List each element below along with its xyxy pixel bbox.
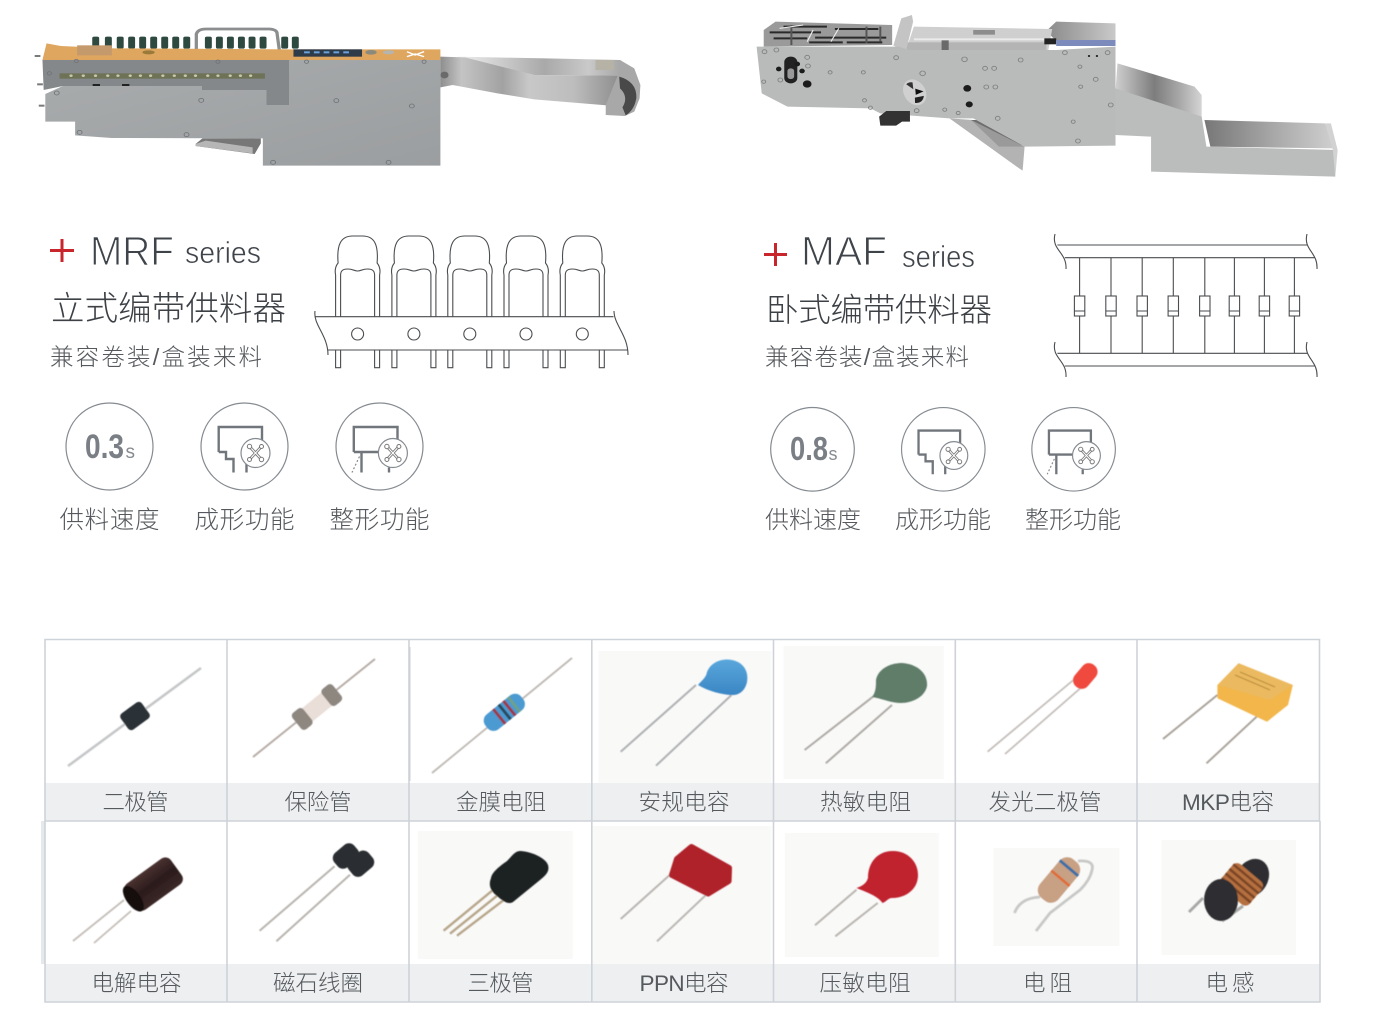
heading: series word: series — [185, 235, 261, 270]
diagram: axial taped components — [1054, 234, 1317, 377]
label: metal film resistor: 金膜电阻 — [456, 790, 546, 815]
component: electrolytic capacitor — [73, 855, 186, 943]
icon: shaping function — [1032, 408, 1115, 491]
label: forming function: 成形功能 — [895, 507, 991, 534]
label: MKP capacitor: MKP电容 — [1182, 790, 1274, 815]
component: inductor — [1189, 853, 1276, 921]
component: magnetic coil beads — [260, 840, 377, 941]
component: safety capacitor — [621, 660, 747, 766]
component: thermistor — [805, 663, 927, 763]
icon: feed speed 0.8s: s — [828, 444, 838, 464]
icon: forming function — [902, 408, 985, 491]
icon: feed speed 0.8s — [771, 408, 854, 491]
component: varistor — [815, 851, 918, 936]
component: transistor — [444, 851, 548, 936]
sub heading: 兼容卷装/盒装来料 — [50, 344, 262, 370]
heading: MRF series: MRF — [90, 228, 174, 274]
heading: series word: series — [902, 239, 975, 274]
panel: MAF series — [757, 15, 1338, 534]
label: LED: 发光二极管 — [988, 790, 1102, 815]
icon: shaping function — [336, 403, 423, 490]
component: MKP capacitor — [1163, 663, 1293, 763]
panel: MRF series — [35, 29, 640, 534]
component: resistor — [1014, 853, 1092, 931]
label: resistor: 电 阻 — [1023, 971, 1072, 996]
heading mark: red plus — [764, 243, 787, 266]
label: forming function: 成形功能 — [194, 506, 294, 534]
label: feed speed: 供料速度 — [60, 506, 160, 534]
sub heading: 兼容卷装/盒装来料 — [765, 344, 969, 370]
diagram: radial taped capacitors — [315, 236, 628, 368]
icon: feed speed 0.3s: 0.3 — [85, 428, 124, 466]
label: fuse: 保险管 — [284, 790, 352, 815]
label: shaping function: 整形功能 — [1025, 507, 1121, 534]
label: PPN capacitor: PPN电容 — [640, 971, 728, 996]
icon: feed speed 0.3s: s — [126, 442, 135, 463]
component: metal film resistor — [432, 658, 572, 773]
label: inductor: 电 感 — [1206, 971, 1254, 996]
label: diode: 二极管 — [102, 790, 168, 815]
photo: MRF feeder machine — [35, 29, 640, 166]
label: shaping function: 整形功能 — [330, 506, 430, 534]
heading mark: red plus — [50, 239, 74, 262]
label: varistor: 压敏电阻 — [820, 971, 910, 996]
icon: feed speed 0.3s — [66, 403, 153, 490]
component: fuse — [253, 659, 375, 757]
label: electrolytic capacitor: 电解电容 — [92, 971, 182, 996]
component: LED — [988, 660, 1101, 754]
label: transistor: 三极管 — [468, 971, 534, 996]
label: thermistor: 热敏电阻 — [820, 790, 911, 815]
photo: MAF feeder machine — [757, 15, 1338, 177]
icon: feed speed 0.8s: 0.8 — [790, 430, 828, 467]
heading: horizontal tape feeder: 卧式编带供料器 — [766, 292, 992, 328]
heading: MAF series: MAF — [801, 228, 887, 274]
label: magnetic coil: 磁石线圈 — [273, 971, 363, 996]
heading: vertical tape feeder: 立式编带供料器 — [51, 291, 286, 328]
label: safety capacitor: 安规电容 — [638, 790, 730, 815]
panel: compatible components grid — [41, 639, 1320, 1002]
label: feed speed: 供料速度 — [765, 507, 861, 534]
icon: forming function — [201, 403, 288, 490]
component: PPN capacitor — [621, 847, 729, 941]
component: diode — [68, 668, 201, 766]
